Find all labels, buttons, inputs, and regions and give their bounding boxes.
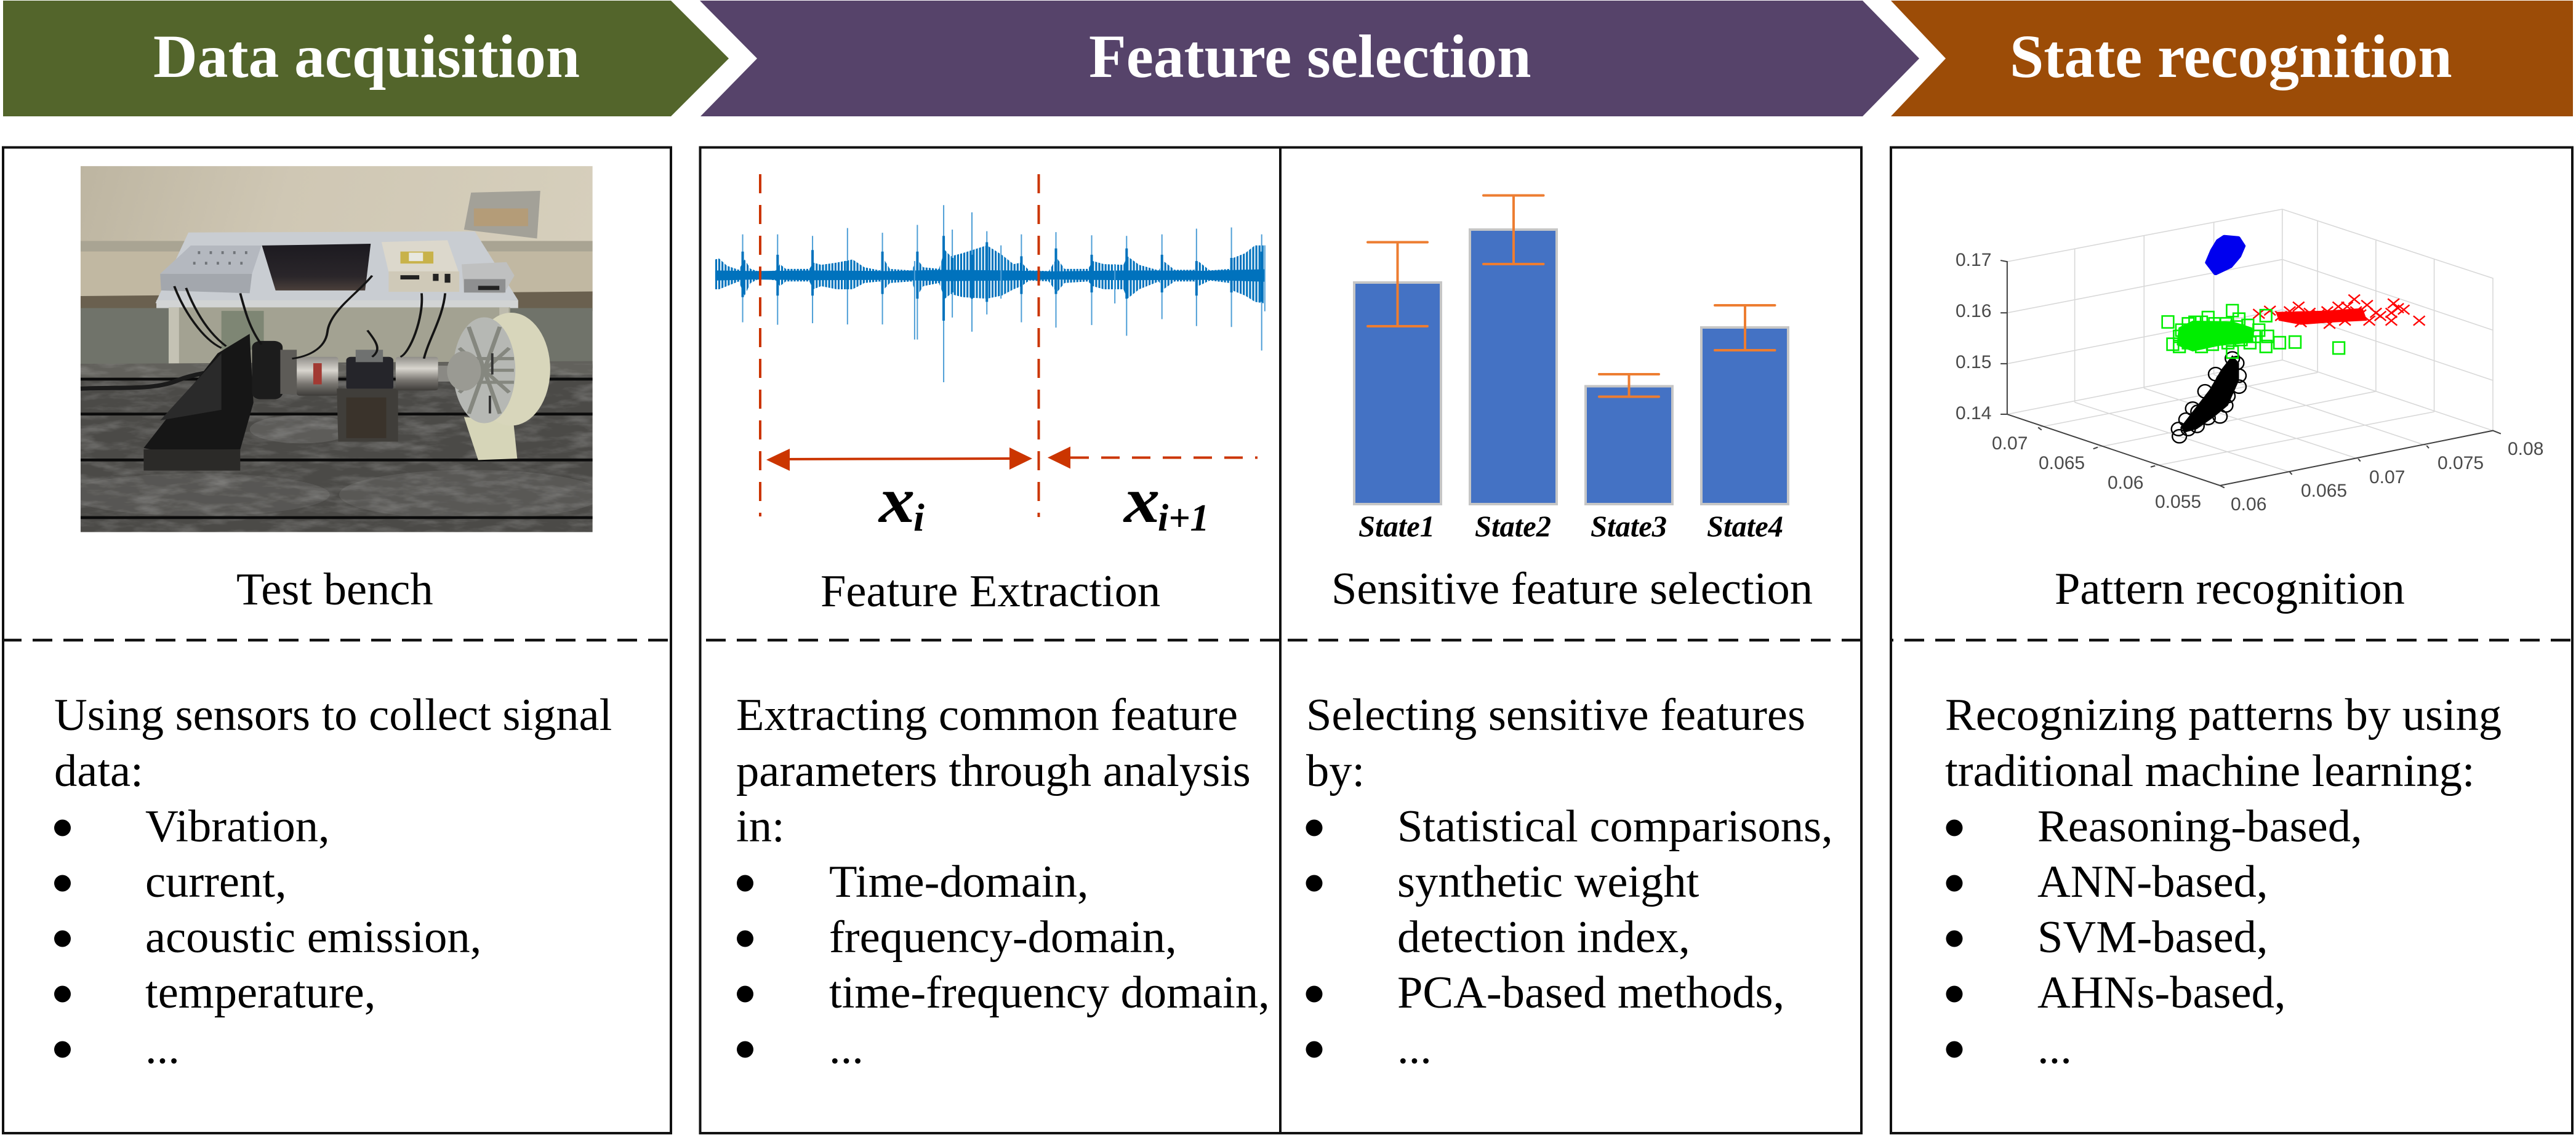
text block: data acquisition description: [54, 690, 612, 1073]
axis labels: z: [1956, 250, 1991, 423]
text block: feature selection description: PCA-based methods,: [1397, 968, 1784, 1018]
label: x_i+1: x: [1123, 465, 1160, 537]
arrow: segment x_i+1: [1048, 447, 1258, 469]
series: green squares: [2162, 305, 2345, 358]
bar: State3: State3: [1591, 511, 1667, 543]
bar: State1: State1: [1358, 511, 1435, 543]
bar: State2: State2: [1475, 511, 1551, 543]
text block: state recognition description: Reasoning-based,: [2037, 801, 2362, 852]
text block: feature extraction description: Extracting common feature: [736, 690, 1238, 740]
header arrow: Data acquisition: [3, 1, 729, 116]
arrow: segment x_i: [766, 447, 1032, 471]
axis labels: z: 0.17: [1956, 250, 1991, 270]
axis labels: z: 0.14: [1956, 403, 1991, 423]
series: black cluster core: [2180, 355, 2239, 432]
text block: data acquisition description: ...: [145, 1023, 180, 1073]
text block: feature extraction description: parameters through analysis: [736, 746, 1251, 796]
text block: feature selection description: [1306, 690, 1833, 1073]
heading: Feature selection: Feature selection: [1089, 22, 1531, 90]
text block: feature extraction description: time-frequency domain,: [829, 968, 1270, 1018]
panel: data acquisition: [2, 148, 671, 1133]
panel: state recognition: [1891, 148, 2572, 1133]
header arrow: Feature selection: [700, 1, 1919, 116]
axes and grid: [2000, 209, 2501, 487]
text block: feature selection description: by:: [1306, 746, 1365, 796]
text block: state recognition description: [1945, 690, 2502, 1073]
label: x_i: i: [913, 495, 925, 539]
text block: state recognition description: AHNs-based,: [2037, 968, 2285, 1018]
boundary: segment end: [1038, 174, 1040, 517]
text block: data acquisition description: acoustic emission,: [145, 912, 481, 963]
axis labels: left: 0.055: [2155, 492, 2201, 512]
chart: state bars with error bars: [1354, 196, 1788, 543]
series: black circles: [2172, 352, 2246, 443]
label: x_i+1: [1123, 465, 1210, 539]
chart: vibration signal waveform: [715, 205, 1265, 382]
caption: Sensitive feature selection: Sensitive feature selection: [1331, 564, 1813, 614]
text block: data acquisition description: Using sensors to collect signal: [54, 690, 612, 740]
text block: state recognition description: ANN-based,: [2037, 857, 2268, 907]
series: red crosses: [2253, 295, 2425, 329]
text block: state recognition description: Recognizing patterns by using: [1945, 690, 2502, 740]
label: x_i: x: [878, 465, 915, 537]
boundary: segment start: [759, 174, 761, 516]
heading: State recognition: State recognition: [2010, 22, 2452, 90]
text block: feature extraction description: Time-domain,: [829, 857, 1088, 907]
caption: Pattern recognition: Pattern recognition: [2055, 564, 2405, 614]
text block: data acquisition description: data:: [54, 746, 143, 796]
bar: State4: [1701, 305, 1788, 543]
axis labels: right: 0.075: [2438, 453, 2484, 473]
text block: state recognition description: traditional machine learning:: [1945, 746, 2475, 796]
chart: 3D scatter plot: [1956, 209, 2543, 515]
heading: Data acquisition: Data acquisition: [153, 22, 580, 90]
text block: state recognition description: ...: [2037, 1023, 2072, 1073]
text block: feature extraction description: frequency-domain,: [829, 912, 1177, 963]
axis labels: right: [2231, 439, 2543, 515]
axis labels: left: 0.06: [2108, 473, 2143, 493]
axis labels: left: 0.065: [2039, 453, 2085, 473]
caption: Feature Extraction: Feature Extraction: [821, 566, 1160, 617]
text block: feature selection description: synthetic weight: [1397, 857, 1699, 907]
axis labels: right: 0.07: [2369, 467, 2405, 487]
series: blue points: [2207, 236, 2244, 273]
bar: State2: [1470, 196, 1557, 543]
axis labels: right: 0.065: [2301, 481, 2347, 501]
photo: test bench: [66, 166, 603, 532]
text block: feature extraction description: [736, 690, 1270, 1073]
text block: feature selection description: detection index,: [1397, 912, 1690, 963]
bar: State4: State4: [1707, 511, 1783, 543]
axis labels: left: 0.07: [1992, 433, 2028, 454]
label: x_i+1: i+1: [1158, 497, 1210, 539]
axis labels: right: 0.06: [2231, 494, 2266, 515]
text block: state recognition description: SVM-based,: [2037, 912, 2268, 963]
caption: Test bench: Test bench: [236, 564, 433, 615]
text block: data acquisition description: Vibration,: [145, 801, 330, 852]
text block: data acquisition description: current,: [145, 857, 287, 907]
panel: feature extraction: [700, 148, 1280, 1133]
text block: data acquisition description: temperature,: [145, 968, 375, 1018]
axis labels: right: 0.08: [2508, 439, 2543, 459]
axis labels: z: 0.15: [1956, 352, 1991, 372]
panel: sensitive feature selection: [1280, 148, 1861, 1133]
text block: feature extraction description: in:: [736, 801, 785, 852]
text block: feature selection description: Statistical comparisons,: [1397, 801, 1833, 852]
bar: State1: [1354, 243, 1441, 543]
text block: feature selection description: ...: [1397, 1023, 1432, 1073]
text block: feature extraction description: ...: [829, 1023, 864, 1073]
text block: feature selection description: Selecting sensitive features: [1306, 690, 1805, 740]
axis labels: left: [1992, 433, 2201, 512]
header arrow: State recognition: [1891, 1, 2573, 116]
axis labels: z: 0.16: [1956, 301, 1991, 321]
bar: State3: [1586, 374, 1672, 543]
